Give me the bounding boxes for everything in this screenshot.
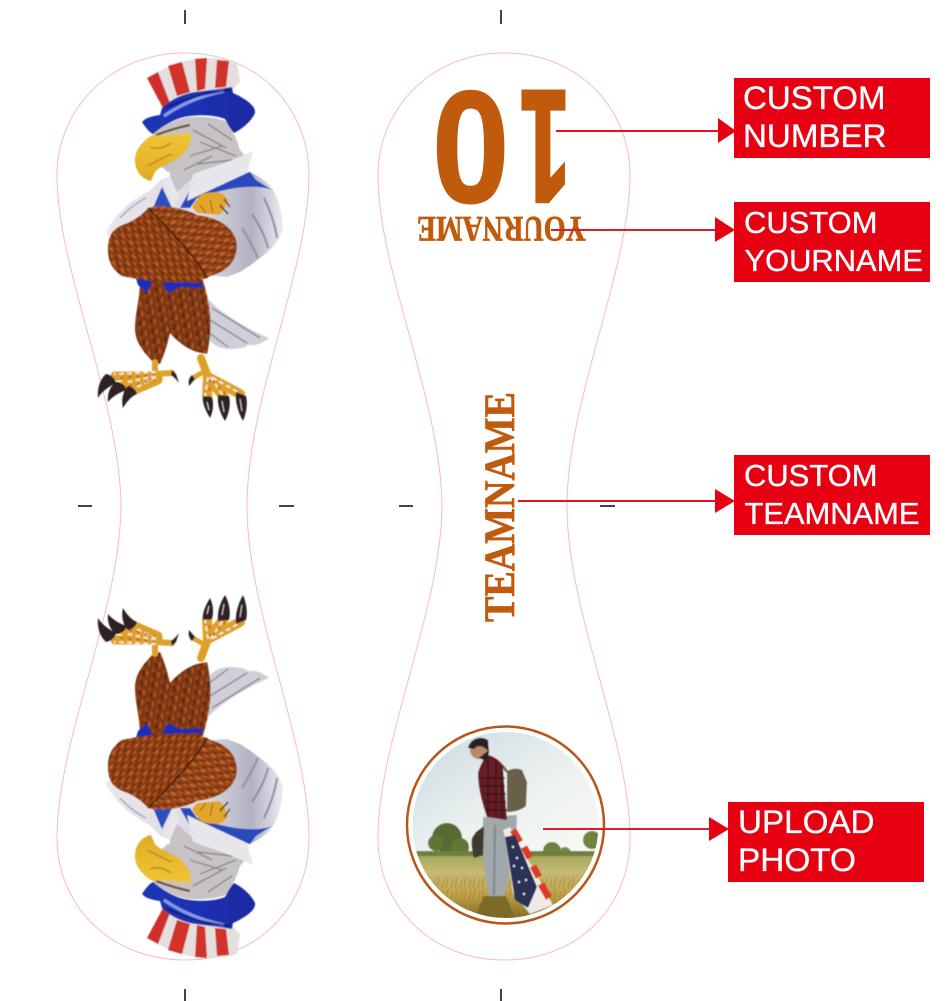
label: custom yourname: CUSTOM bbox=[744, 206, 878, 240]
label: custom teamname: TEAMNAME bbox=[744, 497, 920, 531]
arrow: photo bbox=[543, 817, 729, 841]
label: upload photo: UPLOAD bbox=[738, 804, 874, 840]
label: custom yourname: YOURNAME bbox=[744, 244, 923, 278]
label: custom number bbox=[734, 78, 930, 158]
label: custom number: NUMBER bbox=[743, 118, 886, 154]
illustration: top eagle in patriotic hat bbox=[98, 58, 283, 421]
custom teamname text: TEAMNAME bbox=[477, 392, 524, 622]
panel: front blank outline bbox=[57, 53, 309, 960]
label: custom number: CUSTOM bbox=[743, 80, 886, 116]
custom yourname text: YOURNAME bbox=[417, 209, 586, 249]
label: custom yourname bbox=[734, 202, 930, 282]
label: upload photo bbox=[728, 802, 924, 882]
custom number 10 bbox=[432, 57, 570, 237]
arrow: teamname bbox=[518, 489, 735, 513]
label: custom teamname: CUSTOM bbox=[744, 459, 878, 493]
custom number 10: 1 bbox=[520, 57, 570, 234]
custom number 10: 0 bbox=[432, 58, 509, 237]
label: custom teamname bbox=[734, 455, 930, 535]
uploaded photo circle bbox=[407, 726, 604, 924]
panel: back blank outline bbox=[378, 53, 630, 960]
arrow: yourname bbox=[551, 217, 735, 242]
arrow: number bbox=[556, 118, 736, 143]
registration marks bbox=[78, 10, 615, 1001]
label: upload photo: PHOTO bbox=[738, 842, 856, 878]
illustration: bottom eagle mirrored bbox=[98, 595, 283, 958]
